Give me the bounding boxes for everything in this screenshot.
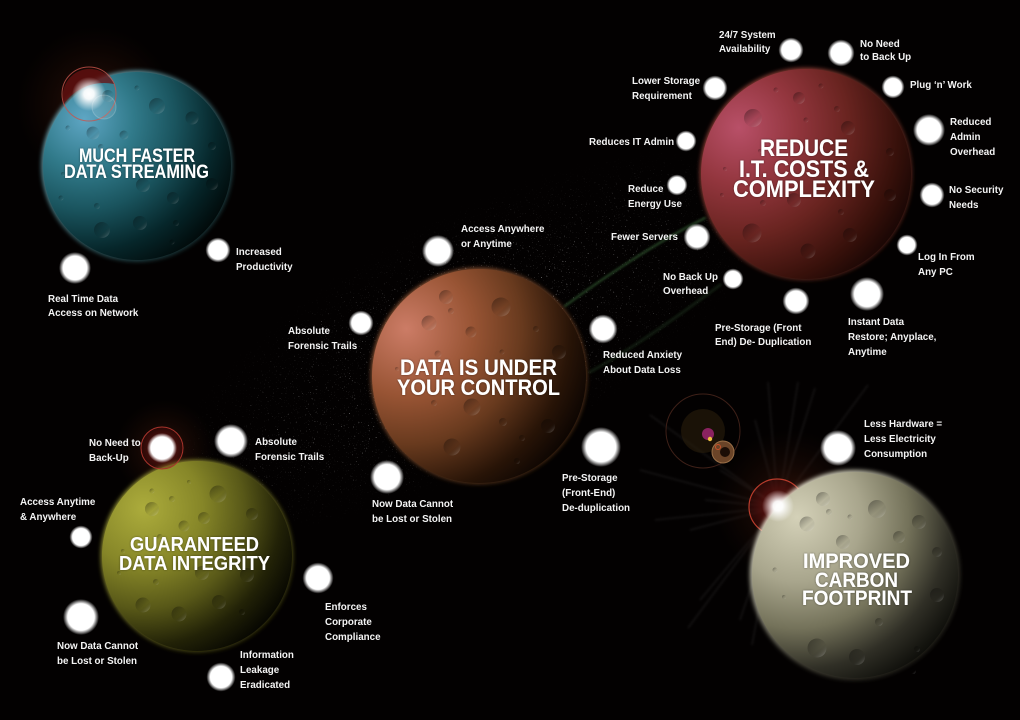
node: lower storage requirement: Lower Storage (632, 76, 701, 87)
node: pre-storage front-end de-duplication: (Front-End) (562, 488, 615, 499)
node: now data cannot be lost 2: be Lost or Stolen (57, 656, 137, 667)
node: no back up overhead (663, 268, 744, 297)
node: now data cannot be lost: be Lost or Stolen (372, 514, 452, 525)
craters (395, 290, 566, 464)
node: pre-storage front-end de-duplication (562, 427, 630, 514)
title: I.T. COSTS & (739, 156, 869, 183)
craters (58, 86, 218, 244)
node: instant data restore (848, 277, 937, 358)
node: no need to back up (828, 39, 911, 66)
title: YOUR CONTROL (397, 375, 560, 400)
title: FOOTPRINT (802, 587, 912, 610)
flare rays (640, 382, 868, 645)
node: reduced admin overhead: Admin (950, 132, 980, 143)
node: increased productivity: Productivity (236, 262, 293, 273)
node: no security needs: Needs (949, 200, 979, 211)
node: access anytime and anywhere (20, 497, 96, 548)
node: absolute forensic trails 2 (214, 424, 325, 463)
node: increased productivity (206, 238, 293, 273)
title: IMPROVED (803, 550, 910, 573)
node: now data cannot be lost 2: Now Data Cannot (57, 641, 139, 652)
node: reduce energy use: Energy Use (628, 199, 682, 210)
title: DATA IS UNDER (400, 355, 557, 380)
node: access anytime and anywhere: Access Anytime (20, 497, 96, 508)
title (397, 355, 560, 400)
node: reduced anxiety: About Data Loss (603, 365, 681, 376)
craters (772, 492, 944, 674)
node: plug n work: Plug ‘n’ Work (910, 80, 972, 91)
title: DATA STREAMING (64, 162, 209, 183)
node: reduce energy use: Reduce (628, 184, 664, 195)
node: enforces corporate compliance: Compliance (325, 632, 381, 643)
planet: data is under your control (371, 268, 587, 484)
node: absolute forensic trails 2: Absolute (255, 437, 297, 448)
node: less hardware (820, 419, 942, 466)
planet: reduce I.T. costs and complexity (700, 68, 912, 280)
orange sphere (372, 269, 586, 483)
node: enforces corporate compliance (302, 562, 381, 643)
node: now data cannot be lost 2 (57, 599, 139, 667)
node: absolute forensic trails: Absolute (288, 326, 330, 337)
beige sphere (752, 472, 958, 678)
node: reduces it admin: Reduces IT Admin (589, 137, 674, 148)
node: access anywhere or anytime: or Anytime (461, 239, 512, 250)
node: absolute forensic trails (288, 310, 374, 352)
title: COMPLEXITY (733, 176, 875, 203)
node: no back up overhead: Overhead (663, 286, 708, 297)
node: lower storage requirement (632, 76, 728, 102)
node: enforces corporate compliance: Enforces (325, 602, 367, 613)
node: less hardware: Consumption (864, 449, 927, 460)
node: reduced anxiety (588, 314, 683, 376)
node: pre-storage de-duplication: Pre-Storage (Front (715, 323, 802, 334)
node: reduce energy use (628, 174, 688, 210)
node: absolute forensic trails 2: Forensic Trails (255, 452, 325, 463)
title: CARBON (815, 569, 898, 592)
title (64, 146, 209, 183)
flare halo behind blue planet (17, 27, 173, 183)
node: reduced anxiety: Reduced Anxiety (603, 350, 683, 361)
node: log in from any pc: Log In From (918, 252, 975, 263)
node: enforces corporate compliance: Corporate (325, 617, 372, 628)
node: access anytime and anywhere: & Anywhere (20, 512, 77, 523)
node: fewer servers: Fewer Servers (611, 232, 679, 243)
node: no need to back up: No Need (860, 39, 900, 50)
node: now data cannot be lost: Now Data Cannot (372, 499, 454, 510)
node: log in from any pc: Any PC (918, 267, 953, 278)
node: less hardware: Less Hardware = (864, 419, 942, 430)
node: no security needs (920, 182, 1004, 211)
node: increased productivity: Increased (236, 247, 282, 258)
blue sphere (43, 72, 231, 260)
node: no need to back-up: No Need to (89, 438, 141, 449)
node: 24/7 system availability (719, 30, 804, 62)
node: information leakage eradicated: Information (240, 650, 294, 661)
green light streak (565, 218, 720, 372)
lens flare ring (141, 427, 183, 469)
node: 24/7 system availability: 24/7 System (719, 30, 776, 41)
node: real time data access (48, 252, 139, 319)
node: plug n work (882, 76, 972, 98)
node: log in from any pc (896, 234, 975, 278)
title (802, 550, 912, 610)
node: pre-storage front-end de-duplication: De-duplication (562, 503, 630, 514)
title: MUCH FASTER (79, 146, 195, 167)
planet: guaranteed data integrity (101, 400, 293, 652)
lens flare cluster (666, 394, 740, 468)
node: pre-storage front-end de-duplication: Pre-Storage (562, 473, 618, 484)
node: pre-storage de-duplication (715, 288, 811, 348)
node: absolute forensic trails: Forensic Trails (288, 341, 358, 352)
node: instant data restore: Restore; Anyplace, (848, 332, 937, 343)
node: no need to back-up: Back-Up (89, 453, 129, 464)
node: no security needs: No Security (949, 185, 1004, 196)
red sphere (701, 69, 911, 279)
starfield band (188, 160, 742, 520)
title (119, 534, 271, 575)
lens flare (62, 67, 116, 121)
node: information leakage eradicated: Leakage (240, 665, 280, 676)
node: information leakage eradicated (206, 650, 294, 692)
node: reduced admin overhead: Reduced (950, 117, 991, 128)
node: reduced admin overhead (913, 114, 995, 158)
node: no back up overhead: No Back Up (663, 272, 718, 283)
flare halo (115, 400, 215, 500)
node: real time data access: Access on Network (48, 308, 139, 319)
node: reduces it admin (589, 130, 696, 152)
node: fewer servers (611, 224, 710, 250)
yellow sphere (102, 461, 292, 651)
title: REDUCE (760, 135, 848, 162)
node: instant data restore: Instant Data (848, 317, 905, 328)
node: reduced admin overhead: Overhead (950, 147, 995, 158)
craters (720, 84, 896, 258)
flare burst (762, 490, 794, 522)
node: no need to back up: to Back Up (860, 52, 911, 63)
node: 24/7 system availability: Availability (719, 44, 771, 55)
title: DATA INTEGRITY (119, 553, 271, 575)
craters (117, 480, 258, 622)
node: pre-storage de-duplication: End) De- Duplication (715, 337, 811, 348)
node: now data cannot be lost (370, 460, 454, 525)
planet: improved carbon footprint (640, 382, 960, 680)
node: less hardware: Less Electricity (864, 434, 936, 445)
node: instant data restore: Anytime (848, 347, 887, 358)
node: access anywhere or anytime (422, 224, 545, 267)
node: lower storage requirement: Requirement (632, 91, 693, 102)
node: access anywhere or anytime: Access Anywhere (461, 224, 545, 235)
node: real time data access: Real Time Data (48, 294, 119, 305)
node: no need to back-up (89, 433, 177, 464)
flare halo (715, 430, 865, 580)
planet: much faster data streaming (17, 27, 232, 262)
title (733, 135, 875, 203)
node: information leakage eradicated: Eradicated (240, 680, 290, 691)
title: GUARANTEED (130, 534, 259, 556)
